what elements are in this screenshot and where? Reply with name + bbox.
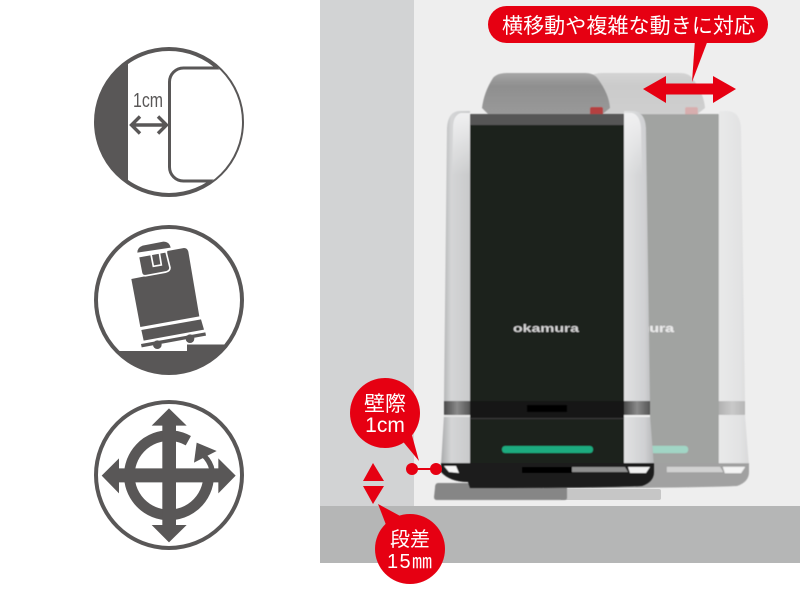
right top highlight [624,113,642,175]
marker: clearance dots [406,463,442,475]
callout: wall clearance: 1cm [365,414,405,437]
band highlight left [444,415,470,417]
arrow: left-right movement [643,76,736,103]
panel: floor [320,506,800,563]
step floor [120,344,224,371]
callout: step height: 15㎜ [387,551,432,573]
dark front panel [470,114,624,466]
green status light [502,446,593,453]
ring arrowhead [194,443,217,463]
panel: room background [414,0,800,506]
ghost floor shadow [560,489,661,500]
icon: omnidirectional movement [96,402,242,548]
left side panel [441,111,470,466]
floor shadow of robot [434,483,567,500]
logo: okamura [513,323,580,335]
callout: lateral and complex movement: 横移動や複雑な動きに対応 [502,15,755,38]
icon: robot on step [90,227,242,380]
icon: wall clearance 1cm [94,47,244,197]
callout: step height [375,504,445,584]
band highlight right [624,415,650,417]
arrow: step down [363,486,384,504]
icon arrow: clearance [132,116,166,134]
callout: step height: 段差 [390,528,430,551]
callout: lateral and complex movement [488,6,768,82]
side band right [624,401,650,415]
callout: wall clearance [350,378,420,461]
arrow: step up [363,463,384,481]
ghost robot (moved position): okamura [608,323,675,335]
ghost robot (moved position) [536,73,749,488]
robot [441,73,654,488]
four-way cross arrows [102,408,236,542]
panel: wall [320,0,414,506]
tilted robot silhouette [131,242,206,349]
robot base [441,463,654,488]
icon label: 1cm: 1cm [133,90,163,112]
ring tail [201,454,215,470]
red button [590,107,603,118]
ring with gap [129,436,209,515]
robot head [482,73,610,116]
side band left [444,401,470,415]
left top highlight [452,113,470,175]
right side panel [624,111,654,466]
callout: wall clearance: 壁際 [364,393,406,416]
